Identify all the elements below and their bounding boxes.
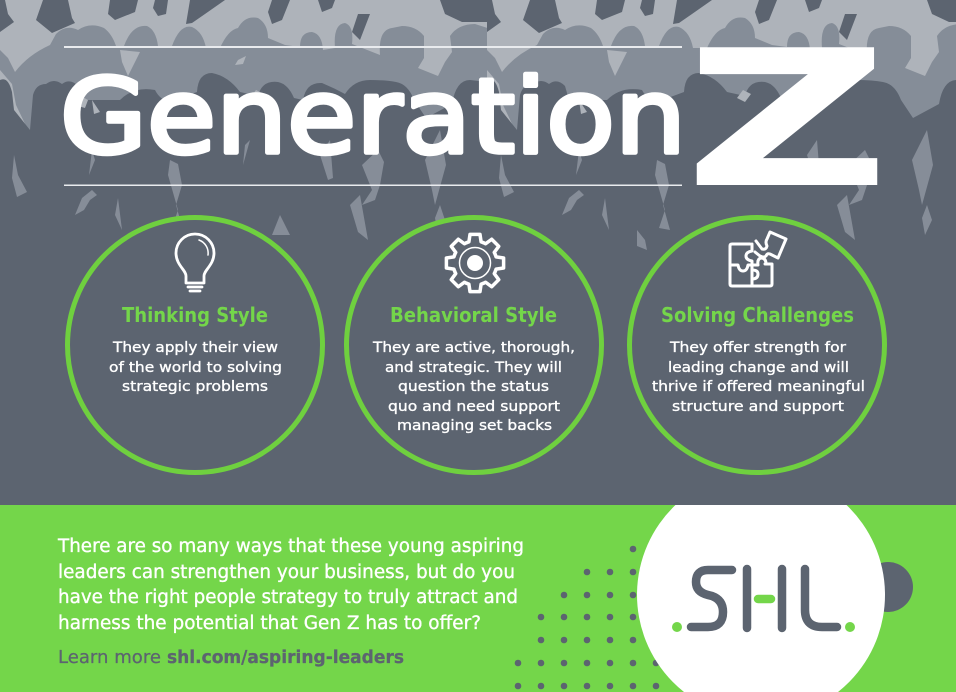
body text <box>109 340 282 395</box>
title: Generation Z: Generation <box>60 58 686 178</box>
white logo circle <box>637 505 885 692</box>
body text: question the status <box>398 379 549 395</box>
icon: light bulb <box>176 234 214 291</box>
closing message <box>57 536 524 634</box>
dark accent circle <box>863 562 913 612</box>
icon: gear <box>446 234 504 292</box>
heading: Thinking Style <box>122 303 268 327</box>
body text: They apply their view <box>112 340 278 356</box>
panel: solving challenges <box>630 218 884 472</box>
SHL logo <box>672 569 855 632</box>
title: Generation Z: Z <box>684 10 890 230</box>
body text: thrive if offered meaningful <box>652 379 865 395</box>
closing message: leaders can strengthen your business, but do you <box>58 562 515 583</box>
heading: Solving Challenges <box>661 303 854 327</box>
panel: behavioral style <box>346 218 602 472</box>
body text: strategic problems <box>122 379 268 395</box>
title: Generation Z <box>60 10 890 230</box>
body text: quo and need support <box>388 399 560 415</box>
body text: and strategic. They will <box>385 360 562 376</box>
icon: puzzle pieces <box>730 232 786 286</box>
panel: green footer <box>0 505 956 692</box>
crowd silhouette background <box>0 0 956 250</box>
dot grid <box>515 546 659 689</box>
closing message: There are so many ways that these young aspiring <box>57 536 524 557</box>
body text: structure and support <box>672 399 844 415</box>
heading: Behavioral Style <box>390 303 557 327</box>
panel: thinking style <box>68 218 322 472</box>
learn more link <box>58 648 404 668</box>
learn more link: Learn more <box>58 648 161 668</box>
body text <box>372 340 575 434</box>
body text <box>652 340 865 415</box>
body text: leading change and will <box>668 360 849 376</box>
body text: of the world to solving <box>109 360 282 376</box>
body text: managing set backs <box>397 418 552 434</box>
body text: They offer strength for <box>669 340 846 356</box>
closing message: have the right people strategy to truly attract and <box>58 587 518 608</box>
closing message: harness the potential that Gen Z has to offer? <box>58 613 481 634</box>
learn more link: shl.com/aspiring-leaders <box>167 648 404 668</box>
body text: They are active, thorough, <box>372 340 575 356</box>
